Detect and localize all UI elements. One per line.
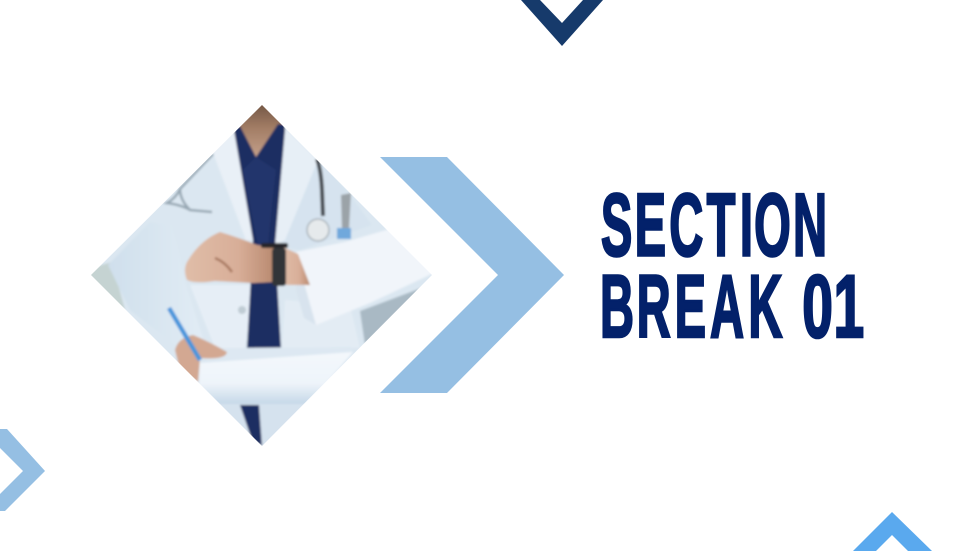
title line 1: SECTION [601, 177, 827, 275]
pocket pens and badge [341, 193, 351, 228]
coat lapels [213, 130, 253, 240]
pen [169, 308, 200, 360]
scrubs [234, 124, 285, 348]
title line 2, number: 01 [802, 256, 864, 356]
coat button [238, 306, 246, 314]
lower hand [175, 335, 227, 382]
title line 2, word: BREAK [600, 258, 782, 357]
right sleeve [296, 230, 431, 324]
right stethoscope tube and chest piece [317, 159, 323, 216]
bottom strip [212, 404, 308, 446]
title: Section Break 01 [600, 177, 864, 357]
wrist watch [272, 248, 286, 286]
left sleeve shading [108, 249, 127, 298]
chevron: large central [380, 157, 564, 393]
forearm behind the watch [283, 247, 310, 285]
chevron: top navy [521, 0, 603, 46]
left stethoscope tube [167, 154, 213, 212]
chevron: bottom-right bright blue [853, 512, 932, 551]
photo backdrop and coat [100, 126, 432, 384]
right coat panel [276, 130, 372, 250]
neck skin [239, 105, 282, 158]
hand on wrist [185, 232, 274, 283]
paper sheet [253, 345, 281, 349]
coat body, lighter panel [192, 286, 250, 348]
paper roll [199, 352, 353, 404]
chevron: bottom-left light blue [0, 429, 45, 511]
diamond photo: doctor checking watch [85, 100, 440, 450]
